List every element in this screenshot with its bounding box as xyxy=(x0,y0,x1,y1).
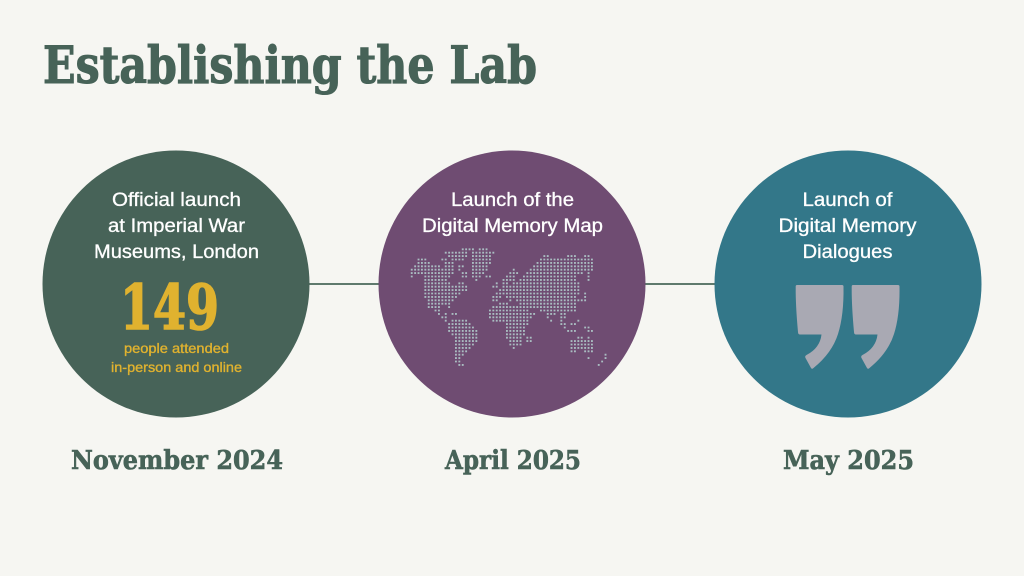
date: April 2025: April 2025 xyxy=(444,446,581,476)
launch description xyxy=(94,190,259,263)
attendance caption: in-person and online xyxy=(111,359,242,375)
launch description: Digital Memory xyxy=(778,216,917,237)
panel: April 2025 map launch xyxy=(378,150,646,418)
attendance caption xyxy=(111,340,242,375)
launch description xyxy=(778,190,917,263)
timeline connector line xyxy=(300,283,720,285)
date: May 2025: May 2025 xyxy=(783,446,914,476)
icon: closing quotation marks xyxy=(796,285,900,369)
panel: November 2024 launch xyxy=(42,150,310,418)
launch description: at Imperial War xyxy=(108,216,246,237)
launch description: Dialogues xyxy=(802,242,892,263)
attendance number: 149 xyxy=(120,271,219,344)
title: Establishing the Lab xyxy=(43,36,537,96)
launch description: Museums, London xyxy=(94,242,259,263)
launch description: Launch of the xyxy=(451,190,574,211)
launch description: Digital Memory Map xyxy=(422,216,603,237)
date: November 2024: November 2024 xyxy=(71,446,283,476)
launch description xyxy=(422,190,603,237)
icon: dotted world map xyxy=(411,249,606,365)
attendance caption: people attended xyxy=(124,340,229,356)
launch description: Official launch xyxy=(112,190,241,211)
launch description: Launch of xyxy=(802,190,893,211)
panel: May 2025 dialogues launch xyxy=(714,150,982,418)
